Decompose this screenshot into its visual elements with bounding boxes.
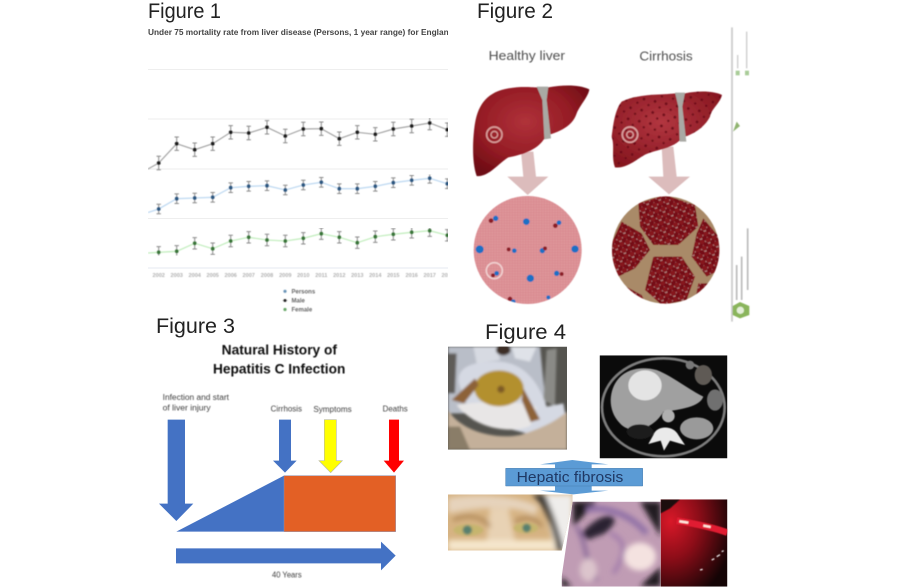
x axis years: 2008 [261, 273, 273, 279]
diagram title: Natural History of [222, 343, 337, 358]
x axis years: 2009 [279, 273, 292, 279]
x axis years: 2002 [152, 273, 165, 279]
x axis years: 2006 [224, 273, 237, 279]
x axis years: 2017 [423, 273, 436, 279]
x axis years: 2010 [297, 273, 310, 279]
chart title: Under 75 mortality rate from liver disease (Persons, 1 year range) for England [148, 27, 454, 37]
panel: clinical signs photo collage [448, 345, 727, 587]
icon: healthy tissue circle [474, 196, 582, 304]
labels above arrows: Symptoms [313, 405, 352, 414]
label: cirrhosis: Cirrhosis [639, 48, 693, 63]
legend: Male [292, 298, 306, 304]
x axis years: 2005 [206, 273, 219, 279]
x axis years: 2013 [351, 273, 364, 279]
callout: hepatic fibrosis double arrow [506, 460, 643, 494]
photo: CT scan [600, 355, 727, 458]
icon: healthy liver [473, 85, 589, 176]
icon: cirrhotic liver [612, 92, 722, 168]
labels above arrows: Deaths [383, 404, 408, 413]
x axis years: 2015 [387, 273, 400, 279]
arrow: infection [159, 420, 193, 521]
timeline label: 40 Years [272, 570, 302, 579]
legend [282, 290, 316, 314]
label: healthy liver: Healthy liver [489, 48, 566, 63]
photo: bleeding endoscopy [661, 499, 727, 587]
arrow: deaths [384, 420, 404, 473]
x axis years: 2003 [170, 273, 183, 279]
x axis years: 2018 [441, 273, 454, 279]
panel: healthy liver vs cirrhosis illustration [473, 27, 749, 322]
sidebar: stock image watermark strip [732, 27, 749, 322]
x axis years: 2016 [405, 273, 418, 279]
arrow: cirrhosis [273, 420, 297, 473]
series: male [148, 123, 460, 169]
heading: Figure 2: Figure 2 [477, 0, 553, 23]
x axis years: 2012 [333, 273, 346, 279]
legend: Female [292, 308, 313, 314]
labels above arrows: of liver injury [163, 404, 211, 413]
shape: liver injury wedge [176, 476, 284, 532]
x axis years: 2004 [188, 273, 202, 279]
callout: hepatic fibrosis double arrow: Hepatic fibrosis [517, 470, 623, 486]
arrow: cirrhosis to tissue [648, 147, 690, 194]
diagram title [213, 343, 345, 377]
line chart [148, 70, 460, 279]
photo: jaundiced eyes [448, 494, 573, 551]
diagram title: Hepatitis C Infection [213, 362, 345, 377]
arrow: timeline [176, 542, 396, 570]
shape: cirrhosis period block [284, 476, 396, 532]
icon: cirrhotic tissue circle [608, 195, 722, 308]
photo: endoscopy varices [562, 502, 661, 587]
heading: Figure 1: Figure 1 [148, 0, 221, 23]
series: female [148, 231, 460, 253]
panel: line chart of liver disease mortality [148, 27, 460, 314]
labels above arrows: Infection and start [163, 393, 230, 402]
x axis years: 2011 [315, 273, 327, 279]
series: persons [148, 178, 460, 212]
x axis years: 2007 [242, 273, 255, 279]
arrow: symptoms [319, 420, 342, 473]
heading: Figure 3: Figure 3 [156, 315, 235, 338]
x axis years: 2014 [369, 273, 382, 279]
photo: ascites abdomen [448, 345, 567, 450]
x axis years [152, 272, 448, 278]
arrow: healthy liver to tissue [507, 152, 548, 195]
panel: natural history of hepatitis C diagram [159, 343, 408, 579]
legend: Persons [292, 290, 316, 296]
labels above arrows [163, 393, 408, 414]
labels above arrows: Cirrhosis [271, 404, 302, 413]
heading: Figure 4: Figure 4 [485, 321, 566, 344]
